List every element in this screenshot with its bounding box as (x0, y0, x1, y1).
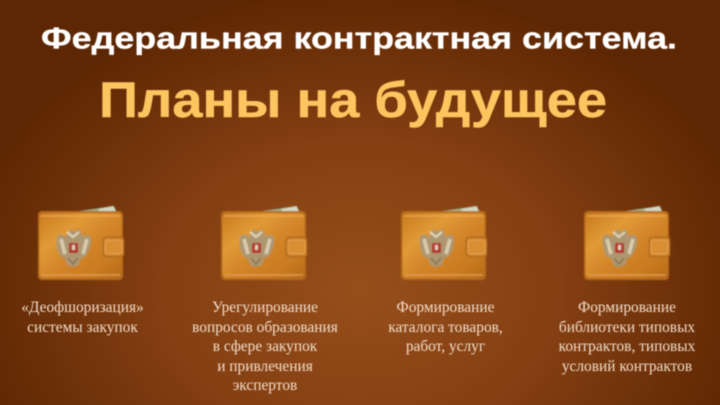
text block: education: экспертов (233, 377, 297, 394)
text block: contract library: условий контрактов (562, 358, 692, 375)
subtitle: Планы на будущее (99, 72, 607, 128)
text block: offshore: «Деофшоризация» (21, 299, 144, 316)
text block: contract library: Формирование (578, 299, 676, 316)
text block: education: Урегулирование (212, 299, 318, 316)
icon: wallet 4 (584, 206, 670, 280)
text block: contract library (559, 299, 696, 375)
text block: offshore: системы закупок (27, 319, 138, 336)
text block: offshore (21, 299, 144, 336)
icon: wallet 2 (221, 206, 307, 280)
title: Федеральная контрактная система. (41, 20, 677, 56)
text block: education (192, 299, 338, 394)
text block: catalogue (388, 299, 503, 355)
text block: education: и привлечения (217, 358, 313, 375)
text block: contract library: контрактов, типовых (559, 338, 696, 355)
text block: education: вопросов образования (192, 319, 338, 336)
text block: catalogue: каталога товаров, (388, 319, 503, 336)
text block: contract library: библиотеки типовых (559, 319, 695, 336)
text block: education: в сфере закупок (213, 338, 318, 355)
icon: wallet 3 (401, 206, 487, 280)
icon: wallet 1 (38, 206, 124, 280)
text block: catalogue: работ, услуг (406, 338, 485, 355)
text block: catalogue: Формирование (397, 299, 495, 316)
